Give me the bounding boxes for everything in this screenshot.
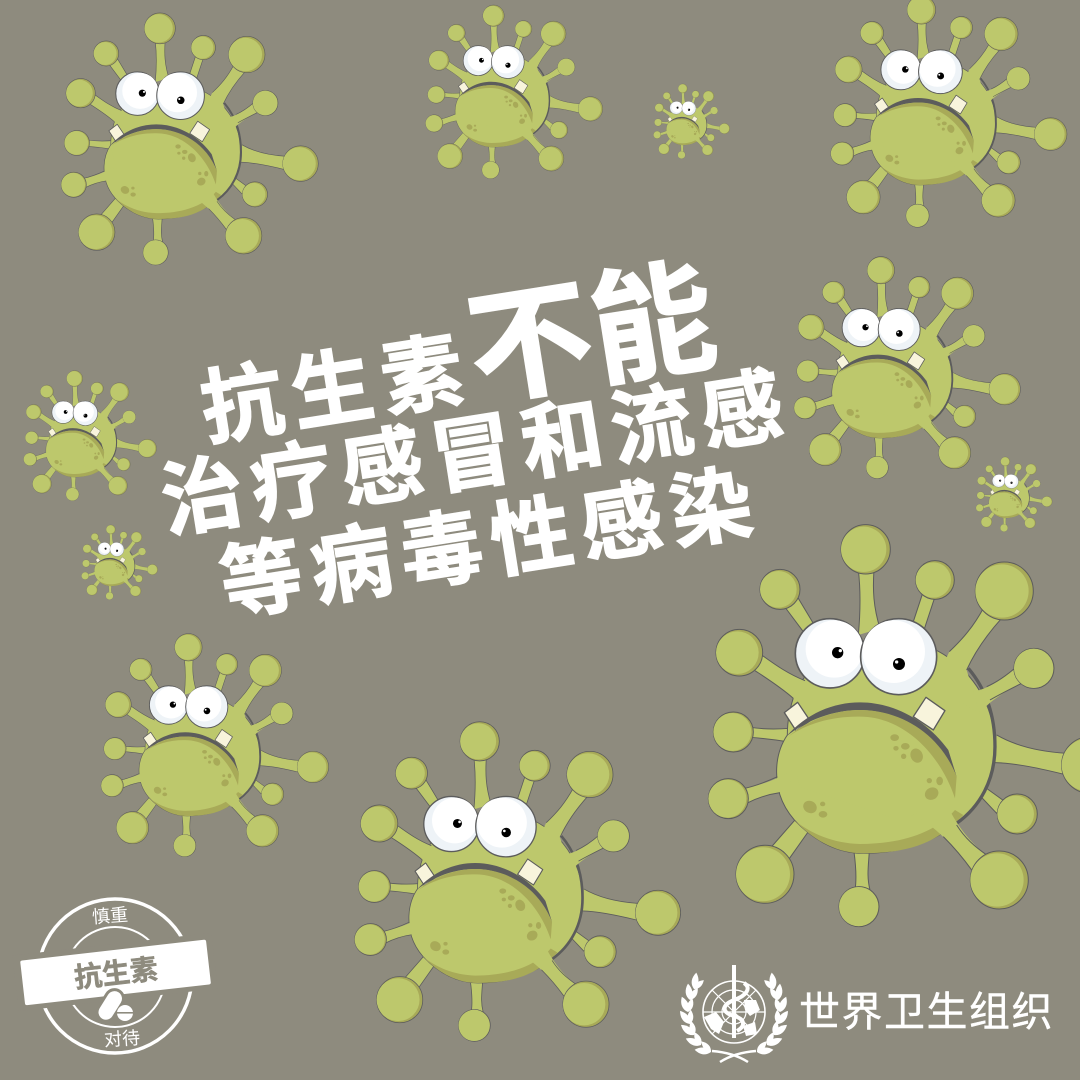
stamp banner [12,933,218,1011]
title line 1: 抗生素不能 [189,248,725,465]
stamp: use antibiotics with care [12,899,218,1053]
WHO name: 世界卫生组织 [799,989,1054,1035]
WHO emblem [677,965,791,1062]
icon: virus middle right [794,257,1020,478]
title line 3: 等病毒性感染 [214,457,768,632]
stamp banner label: 抗生素 [73,953,160,994]
icon: virus top middle [426,5,603,179]
icon: small virus left [24,371,157,501]
stamp top text: 慎重 [91,905,129,927]
icon: pills [92,984,134,1027]
title [155,248,798,632]
stamp bottom text: 对待 [103,1028,141,1050]
icon: tiny virus top [654,84,730,159]
title line 2: 治疗感冒和流感 [155,359,798,549]
icon: tiny virus left [82,525,158,600]
icon: virus top left [61,13,318,265]
icon: virus top right [831,0,1067,227]
icon: virus lower left [101,634,329,857]
icon: large virus right [708,525,1080,927]
icon: virus bottom centre [355,722,681,1041]
icon: tiny virus right [976,457,1052,532]
